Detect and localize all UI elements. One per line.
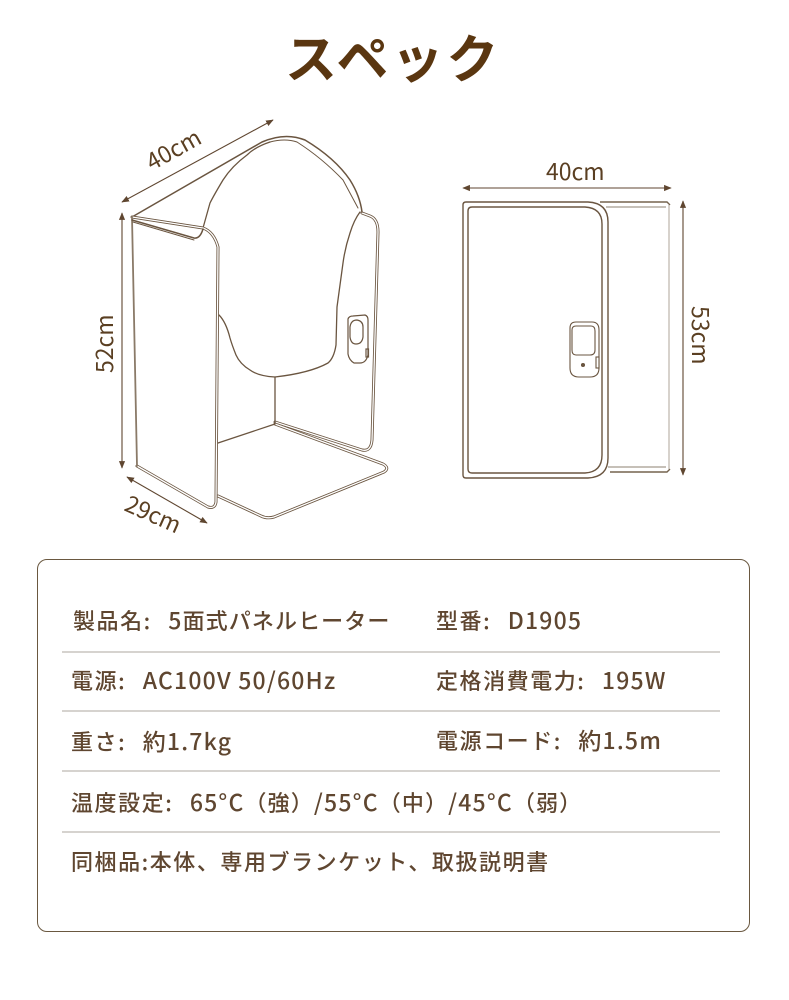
floor panel — [218, 424, 387, 518]
dimension: 29cm depth — [120, 477, 207, 540]
dimension: 52cm height: 52cm — [86, 314, 120, 373]
spec: included items: 同梱品:本体、専用ブランケット、取扱説明書 — [71, 845, 550, 877]
diagram: product dimensions — [86, 119, 719, 540]
dimension: 53cm height: 53cm — [685, 306, 719, 365]
dimension: 40cm width, front view: 40cm — [546, 153, 605, 187]
illustration: open heater, perspective view — [132, 136, 387, 518]
dimension: 40cm width, perspective view — [122, 119, 273, 202]
spec: rated power: 定格消費電力: 195W — [436, 662, 667, 696]
spec: weight: 重さ: 約1.7kg — [71, 723, 232, 757]
icon: controller, front view — [570, 322, 599, 377]
spec: temperature settings: 温度設定: 65°C（強）/55°C（中）/45°C（弱） — [71, 784, 582, 818]
dimension: 29cm depth: 29cm — [120, 485, 187, 540]
spec: power cord: 電源コード: 約1.5m — [436, 722, 662, 756]
title: スペック — [285, 18, 501, 93]
spec: product name: 製品名: 5面式パネルヒーター — [73, 602, 390, 636]
icon: controller, perspective view — [348, 315, 368, 363]
panel: specification table — [37, 559, 750, 932]
blanket hood — [132, 136, 362, 217]
dimension: 40cm width, perspective view: 40cm — [139, 119, 207, 177]
back panel frame — [275, 213, 378, 450]
front left panel — [132, 217, 218, 507]
spec: power supply: 電源: AC100V 50/60Hz — [71, 662, 336, 696]
spec: model number: 型番: D1905 — [436, 602, 582, 636]
illustration: folded heater, front view — [463, 202, 670, 478]
